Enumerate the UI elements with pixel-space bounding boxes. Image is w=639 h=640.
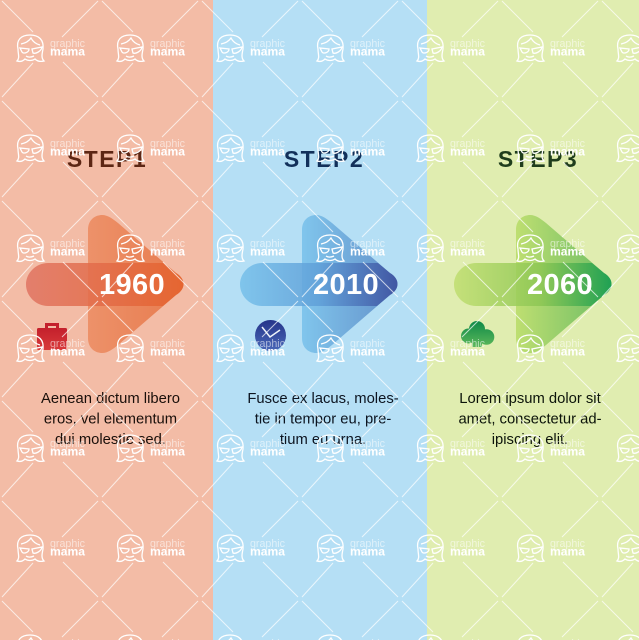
heading: step 1: STEP1 — [67, 146, 147, 172]
heading: step 2: STEP2 — [284, 146, 364, 172]
text block: step 2 description: tium eu urna. — [280, 432, 366, 448]
text block: step 2 description: tie in tempor eu, pre- — [255, 412, 391, 428]
arrow: 2060: 2060 — [527, 269, 593, 301]
text block: step 3 description: amet, consectetur ad- — [458, 412, 602, 428]
arrow: 2060 — [454, 215, 612, 353]
arrow: 2010 — [240, 215, 398, 353]
text block: step 1 description: Aenean dictum libero — [41, 391, 180, 407]
icon: briefcase — [37, 323, 67, 350]
panel: step 2 — [213, 0, 427, 640]
arrow: 1960 — [26, 215, 184, 353]
text block: step 1 description: dui molestie sed. — [55, 432, 166, 448]
icon: clover — [461, 321, 494, 347]
text block: step 1 description: eros, vel elementum — [44, 412, 177, 428]
text block: step 3 description: ipiscing elit. — [492, 432, 568, 448]
heading: step 3: STEP3 — [498, 146, 578, 172]
panel: step 1 — [0, 0, 213, 640]
arrow: 1960: 1960 — [99, 269, 165, 301]
arrow: 2010: 2010 — [313, 269, 379, 301]
text block: step 2 description: Fusce ex lacus, moles- — [247, 391, 399, 407]
icon: check circle — [255, 320, 286, 351]
panel: step 3 — [427, 0, 639, 640]
text block: step 3 description: Lorem ipsum dolor sit — [459, 391, 601, 407]
